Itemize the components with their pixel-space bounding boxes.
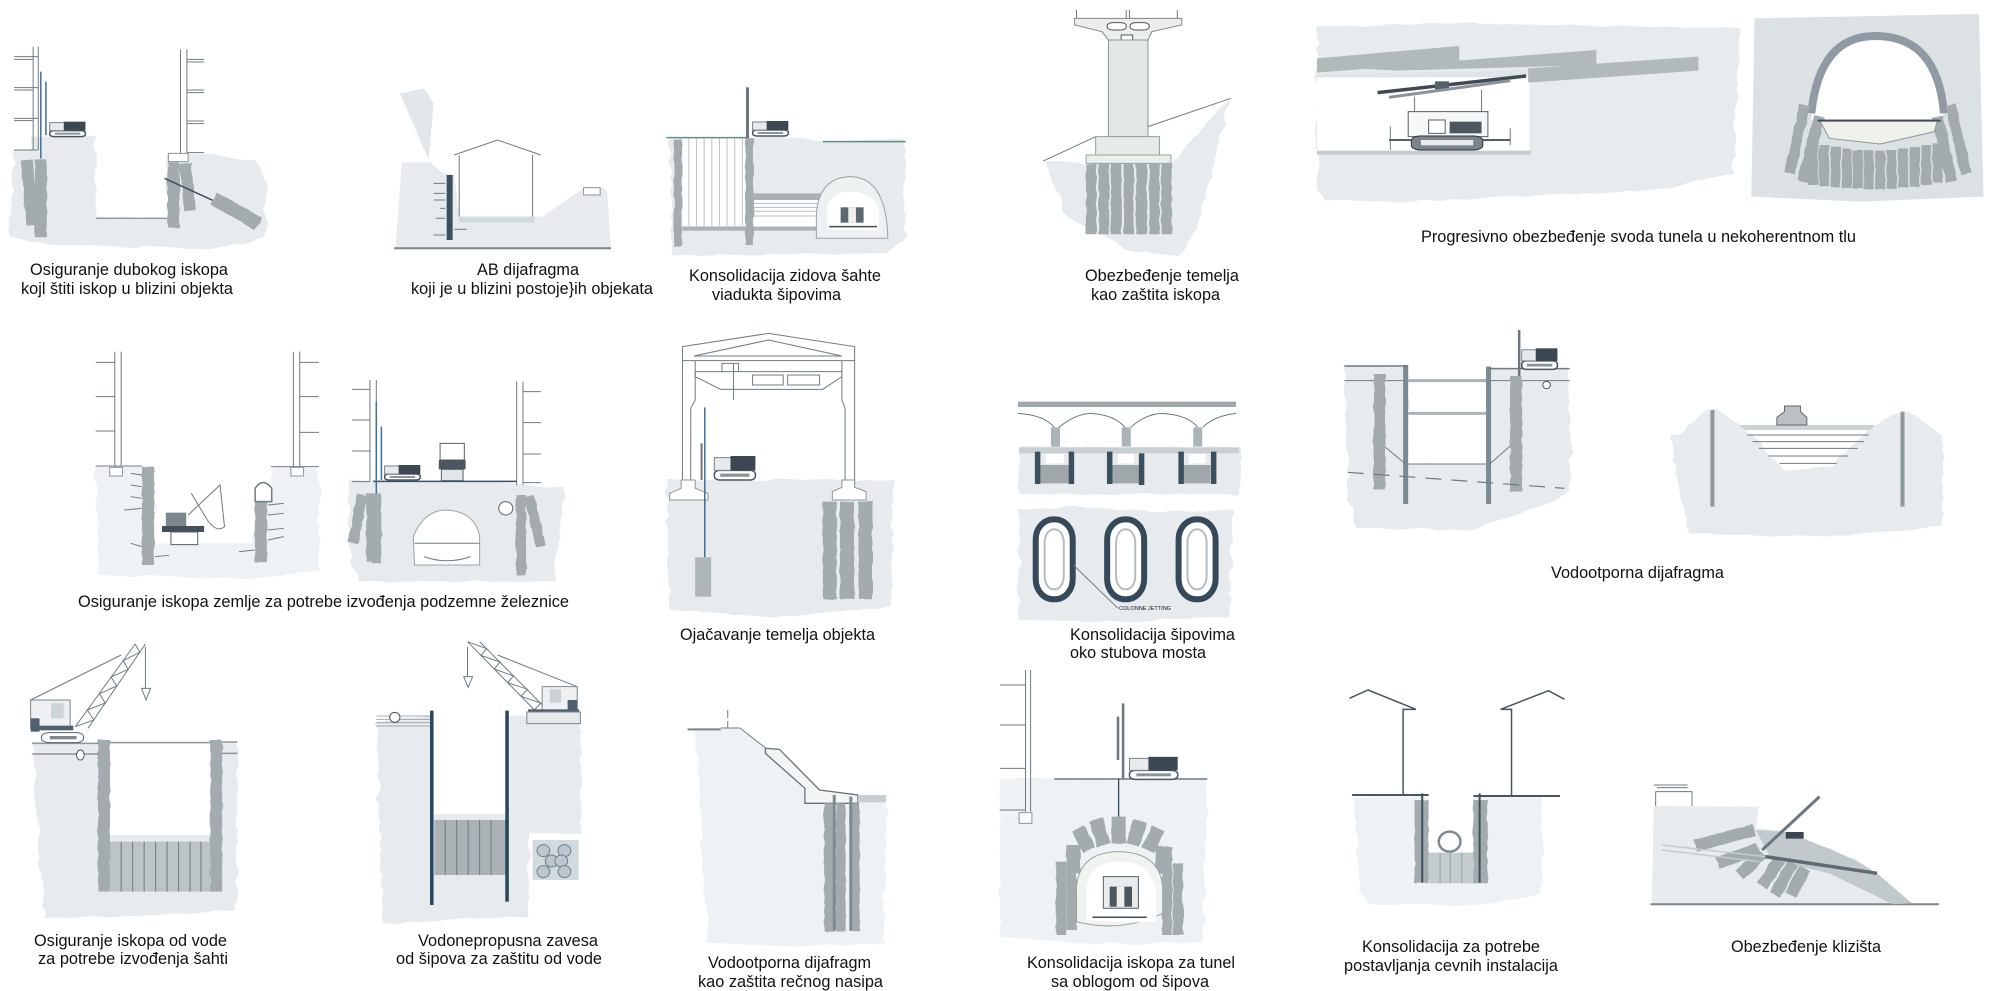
sliding plane — [1662, 845, 1765, 862]
ground line — [1054, 778, 1207, 780]
water level — [32, 742, 237, 754]
long anchor — [1765, 857, 1877, 873]
caption: pile curtain: od šipova za zaštitu od vode — [396, 949, 602, 968]
right building — [180, 49, 204, 153]
pile plan detail — [533, 840, 578, 880]
arches — [1018, 413, 1236, 427]
water band — [1739, 425, 1875, 430]
panel: progressive tunnel vault protection longitudinal — [1317, 23, 1740, 202]
roof — [682, 333, 855, 361]
water symbol — [1543, 381, 1550, 389]
deck — [1018, 402, 1236, 407]
water lines — [1748, 435, 1869, 463]
grouted piles — [1379, 374, 1516, 492]
pile blocks — [1040, 465, 1210, 483]
caption: river embankment — [698, 953, 884, 991]
panel: river embankment diaphragm — [688, 710, 887, 946]
tunnel cavity — [1317, 75, 1529, 152]
barge — [1777, 406, 1807, 425]
caption: deep excavation — [21, 260, 234, 298]
crown piles fan — [1790, 105, 1966, 182]
panel: tunnel excavation consolidation — [1000, 670, 1207, 943]
soil mass — [1019, 447, 1241, 495]
viaduct deck — [1075, 18, 1182, 40]
soil mass — [1652, 806, 1912, 905]
building — [1654, 785, 1692, 806]
walls — [678, 138, 749, 247]
anchor and inclined pile — [165, 178, 252, 218]
shelter — [255, 482, 272, 502]
panel: bridge pier consolidation plan — [1019, 507, 1233, 622]
label: colonne jetting: COLONNE JETTING — [1119, 606, 1171, 612]
building — [1000, 670, 1031, 812]
soil mass — [1019, 507, 1233, 622]
road — [584, 188, 600, 195]
soil mass — [376, 715, 582, 923]
diaphragm lines — [834, 795, 851, 931]
drilling machine — [1378, 76, 1526, 150]
soil mass — [1344, 366, 1571, 530]
side piles — [1061, 847, 1178, 935]
buildings — [352, 380, 541, 485]
caption: shaft walls: viadukta šipovima — [712, 285, 842, 304]
soil mass — [1317, 23, 1740, 202]
ground left line — [688, 728, 721, 730]
caption: pipelines: Konsolidacija za potrebe — [1362, 937, 1540, 956]
piles — [1091, 164, 1166, 234]
caption: pipelines: postavljanja cevnih instalacija — [1344, 956, 1559, 975]
caption: tunnel lining — [1027, 953, 1235, 991]
left roof — [1350, 690, 1416, 795]
panel: underground railway excavation left — [96, 352, 319, 578]
caption: shaft water: za potrebe izvođenja šahti — [38, 949, 228, 968]
soil mass — [10, 137, 267, 248]
ground line — [1344, 366, 1570, 369]
drilling rig — [1129, 757, 1178, 779]
river bed — [858, 795, 886, 802]
panel: bridge pier consolidation elevation — [1018, 402, 1241, 495]
drilling rig — [50, 122, 85, 137]
footings — [110, 467, 122, 476]
anchors — [124, 473, 284, 557]
caption: shaft walls — [689, 266, 881, 304]
caption: landslide: Obezbeđenje klizišta — [1731, 937, 1882, 956]
soil mass — [96, 467, 319, 578]
panel: shaft water protection — [31, 644, 237, 918]
column — [1108, 40, 1148, 137]
pier outlines — [1045, 529, 1207, 589]
truck — [439, 443, 466, 481]
side piles — [104, 740, 216, 892]
dashed level — [1348, 472, 1564, 488]
rig — [1786, 832, 1804, 839]
panel: waterproof diaphragm embankment — [1670, 406, 1943, 537]
piers — [1055, 427, 1198, 447]
tree — [400, 88, 434, 160]
train — [1103, 877, 1138, 908]
tunnel crown strip — [1317, 71, 1526, 77]
left building — [14, 47, 38, 150]
footings — [670, 480, 708, 500]
caption: pile curtain — [396, 931, 602, 968]
caption: diaphragm: koji je u blizini postoje}ih objekata — [411, 279, 654, 298]
drilling rig — [714, 456, 755, 480]
pile footings — [1046, 454, 1205, 463]
walls — [1406, 365, 1489, 504]
caption: bridge piers: oko stubova mosta — [1070, 643, 1207, 662]
caption: deep excavation: kojl štiti iskop u blizini objekta — [21, 279, 234, 298]
gallery — [746, 200, 826, 227]
diaphragm wall — [447, 175, 453, 240]
columns — [682, 361, 855, 487]
buildings — [96, 352, 319, 467]
caption: bridge piers — [1070, 625, 1236, 662]
striped shaft — [689, 138, 742, 226]
soil mass — [667, 480, 893, 617]
soil mass — [32, 743, 237, 918]
pile block — [1429, 853, 1473, 883]
crane — [464, 642, 580, 724]
tunnel — [413, 510, 480, 565]
sheet walls — [1422, 793, 1480, 883]
panel: waterproof diaphragm excavation — [1344, 330, 1571, 530]
floor slab — [459, 217, 534, 223]
radial piles — [1073, 817, 1163, 873]
caption: foundation protection — [1085, 266, 1240, 304]
soil mass — [1751, 14, 1983, 202]
piles — [27, 159, 190, 237]
caption: tunnel lining: sa oblogom od šipova — [1051, 972, 1210, 991]
umbrella piles — [1317, 46, 1698, 83]
caption: deep excavation: Osiguranje dubokog iskopa — [30, 260, 229, 279]
panel: progressive tunnel vault protection cross section — [1751, 14, 1983, 202]
retaining piles — [148, 467, 261, 565]
piles — [830, 502, 865, 599]
water lines — [376, 716, 431, 726]
soil mass — [670, 137, 906, 255]
panel: bridge pier foundation — [1043, 10, 1231, 257]
caption: shaft walls: Konsolidacija zidova šahte — [689, 266, 881, 285]
ground line — [373, 480, 517, 482]
arch ring — [1811, 36, 1944, 113]
caption: foundation protection: Obezbeđenje temelja — [1085, 266, 1240, 285]
caption: pipelines — [1344, 937, 1559, 975]
crane beam — [695, 363, 842, 400]
train — [841, 207, 864, 223]
drilling rig — [1522, 348, 1557, 369]
panel: landslide stabilisation — [1651, 785, 1939, 905]
caption: shaft water — [34, 931, 228, 968]
soil mass — [1354, 797, 1542, 905]
drill boom — [1762, 797, 1820, 850]
side piles — [1422, 800, 1480, 883]
soil mass — [695, 728, 887, 946]
panel: reinforced concrete diaphragm — [394, 88, 611, 248]
base line — [394, 247, 611, 249]
trench — [1429, 795, 1473, 853]
water line — [1344, 380, 1570, 382]
panel: shaft wall consolidation — [667, 87, 906, 255]
tunnel — [1077, 852, 1163, 926]
caption: underground railway: Osiguranje iskopa zemlje za potrebe izvođenja podzemne železnice — [78, 592, 569, 611]
piles — [829, 803, 855, 932]
ground band — [1019, 447, 1239, 453]
wire — [1118, 778, 1120, 817]
pile rings — [1036, 519, 1216, 599]
columns — [1038, 452, 1214, 485]
lining below tunnel — [1820, 120, 1938, 144]
excavation — [434, 710, 506, 814]
panel: building foundation reinforcement — [667, 333, 893, 617]
panel: deep excavation protection — [10, 47, 267, 248]
caption: river embankment: Vodootporna dijafragm — [708, 953, 871, 972]
caption: bridge piers: Konsolidacija šipovima — [1070, 625, 1236, 644]
soil mass — [1043, 98, 1231, 257]
panel: pipeline installation consolidation — [1350, 690, 1564, 905]
soil mass — [1000, 778, 1207, 943]
soil mass — [395, 162, 611, 248]
plug piles — [110, 842, 210, 892]
house outline — [454, 140, 541, 217]
drilling rig — [385, 465, 420, 480]
panel: waterproof pile curtain — [376, 642, 582, 923]
soil mass — [1670, 409, 1943, 537]
excavator — [162, 485, 225, 545]
ground line — [667, 138, 906, 142]
panel: underground railway excavation right — [348, 380, 564, 582]
caption: diaphragm: AB dijafragma — [477, 260, 580, 279]
slope outline — [1043, 98, 1231, 161]
invert band — [1317, 151, 1531, 155]
pile block — [434, 820, 506, 875]
pile cap — [1096, 137, 1159, 155]
excavation — [110, 740, 210, 835]
caption: tunnel lining: Konsolidacija iskopa za tunel — [1027, 953, 1235, 972]
leader — [1073, 565, 1118, 608]
caption: building foundation: Ojačavanje temelja objekta — [680, 625, 876, 644]
shaft — [682, 138, 746, 226]
caption: pile curtain: Vodonepropusna zavesa — [418, 931, 599, 950]
small pipe — [499, 502, 513, 515]
soil mass — [348, 481, 564, 582]
tunnel — [816, 177, 888, 238]
excavation floor — [1383, 445, 1510, 465]
slope — [721, 728, 820, 790]
caption: shaft water: Osiguranje iskopa od vode — [34, 931, 227, 950]
crane — [31, 644, 151, 743]
excavation floor line — [96, 217, 167, 219]
right roof — [1501, 691, 1564, 795]
struts — [1408, 381, 1486, 413]
invert piles — [1813, 143, 1938, 189]
piles — [353, 493, 541, 575]
revetment — [765, 748, 858, 803]
anchoring piles — [1695, 830, 1805, 895]
base line — [1651, 903, 1939, 905]
strut — [1818, 120, 1941, 122]
drilling rig — [753, 121, 788, 136]
ground lines — [1352, 794, 1560, 797]
footing — [168, 153, 188, 162]
caption: waterproof diaphragm: Vodootporna dijafragma — [1551, 563, 1725, 582]
caption: river embankment: kao zaštita rečnog nasipa — [698, 972, 884, 991]
pipe — [1439, 832, 1460, 852]
sliding wedge — [1756, 830, 1912, 904]
tunnel opening — [1811, 36, 1944, 120]
caption: tunnel vault: Progresivno obezbeđenje svoda tunela u nekoherentnom tlu — [1421, 227, 1856, 246]
walls — [1712, 410, 1902, 507]
curtain walls — [432, 711, 507, 905]
caption: foundation protection: kao zaštita iskopa — [1091, 285, 1221, 304]
caption: diaphragm — [411, 260, 654, 298]
wire — [704, 407, 706, 557]
